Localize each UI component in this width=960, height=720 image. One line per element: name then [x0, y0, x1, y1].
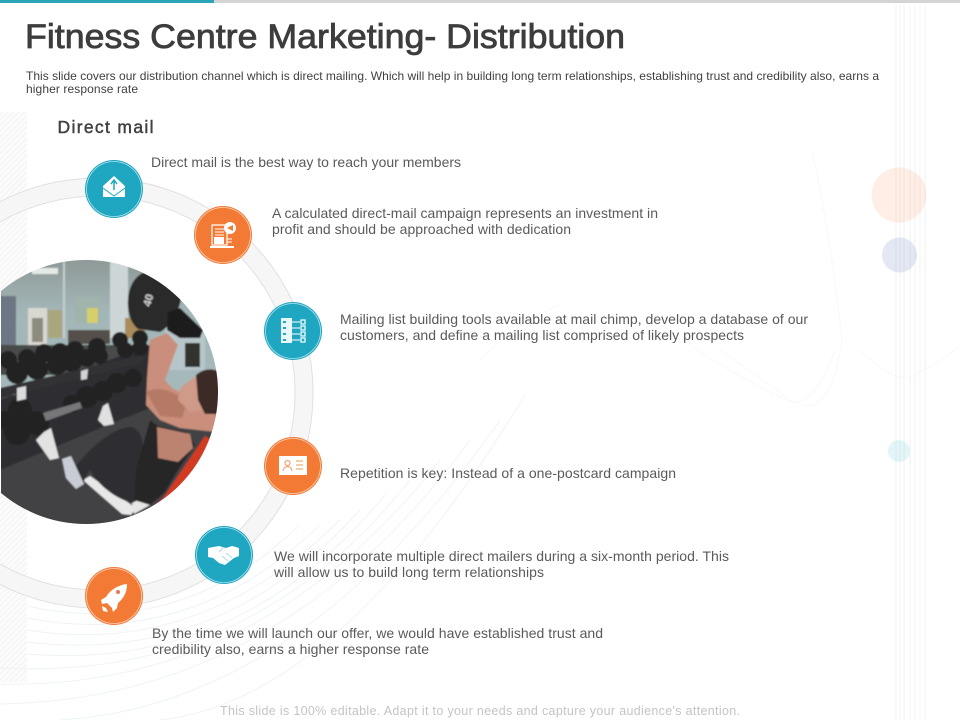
text 2 [272, 205, 658, 237]
intro text [26, 69, 879, 96]
intro text: higher response rate [26, 82, 138, 96]
text 3: Mailing list building tools available at mail chimp, develop a database of our [340, 311, 808, 327]
icon 1: envelope upload [85, 160, 143, 218]
subheading: direct mail: Direct mail [58, 117, 154, 137]
background hatch strip [0, 112, 27, 682]
top progress bar [0, 0, 960, 3]
ring [0, 187, 304, 599]
icon 3: mailing list [264, 302, 322, 360]
icon 6: rocket [85, 567, 143, 625]
photo: gym with woman lifting dumbbell [0, 258, 220, 530]
text 6: credibility also, earns a higher response rate [152, 641, 429, 657]
dumbbell held [128, 271, 203, 338]
intro text: This slide covers our distribution channel which is direct mailing. Which will help in building long term relationships, establishing trust and credibility also, earns a [26, 69, 879, 83]
text 6 [152, 625, 603, 657]
icon 2: newsletter and megaphone [194, 206, 252, 264]
text 3: customers, and define a mailing list comprised of likely prospects [340, 327, 744, 343]
icon 4: contact card [264, 437, 322, 495]
decorative circle: aqua [888, 440, 910, 462]
dumbbell racks [0, 330, 148, 460]
text 1: Direct mail is the best way to reach your members [151, 154, 461, 170]
woman: legs, bench, shirt [62, 333, 220, 515]
text 2: A calculated direct-mail campaign represents an investment in [272, 205, 658, 221]
text 3 [340, 311, 808, 343]
text 5 [273, 548, 729, 580]
dumbbell held: 40 [142, 293, 156, 308]
decorative circle: peach [872, 168, 926, 222]
text 2: profit and should be approached with dedication [272, 221, 571, 237]
decorative circle: blue [882, 238, 917, 272]
title: Fitness Centre Marketing- Distribution [25, 18, 625, 56]
background vertical lines [896, 5, 925, 720]
background concentric lines [0, 395, 525, 720]
text 5: will allow us to build long term relationships [273, 564, 544, 580]
icon 5: handshake [195, 526, 253, 584]
text 5: We will incorporate multiple direct mailers during a six-month period. This [274, 548, 729, 564]
text 6: By the time we will launch our offer, we would have established trust and [152, 625, 603, 641]
footer note: This slide is 100% editable. Adapt it to your needs and capture your audience's attention. [220, 704, 740, 718]
text 4: Repetition is key: Instead of a one-postcard campaign [340, 465, 676, 481]
background wave lines [480, 152, 960, 406]
